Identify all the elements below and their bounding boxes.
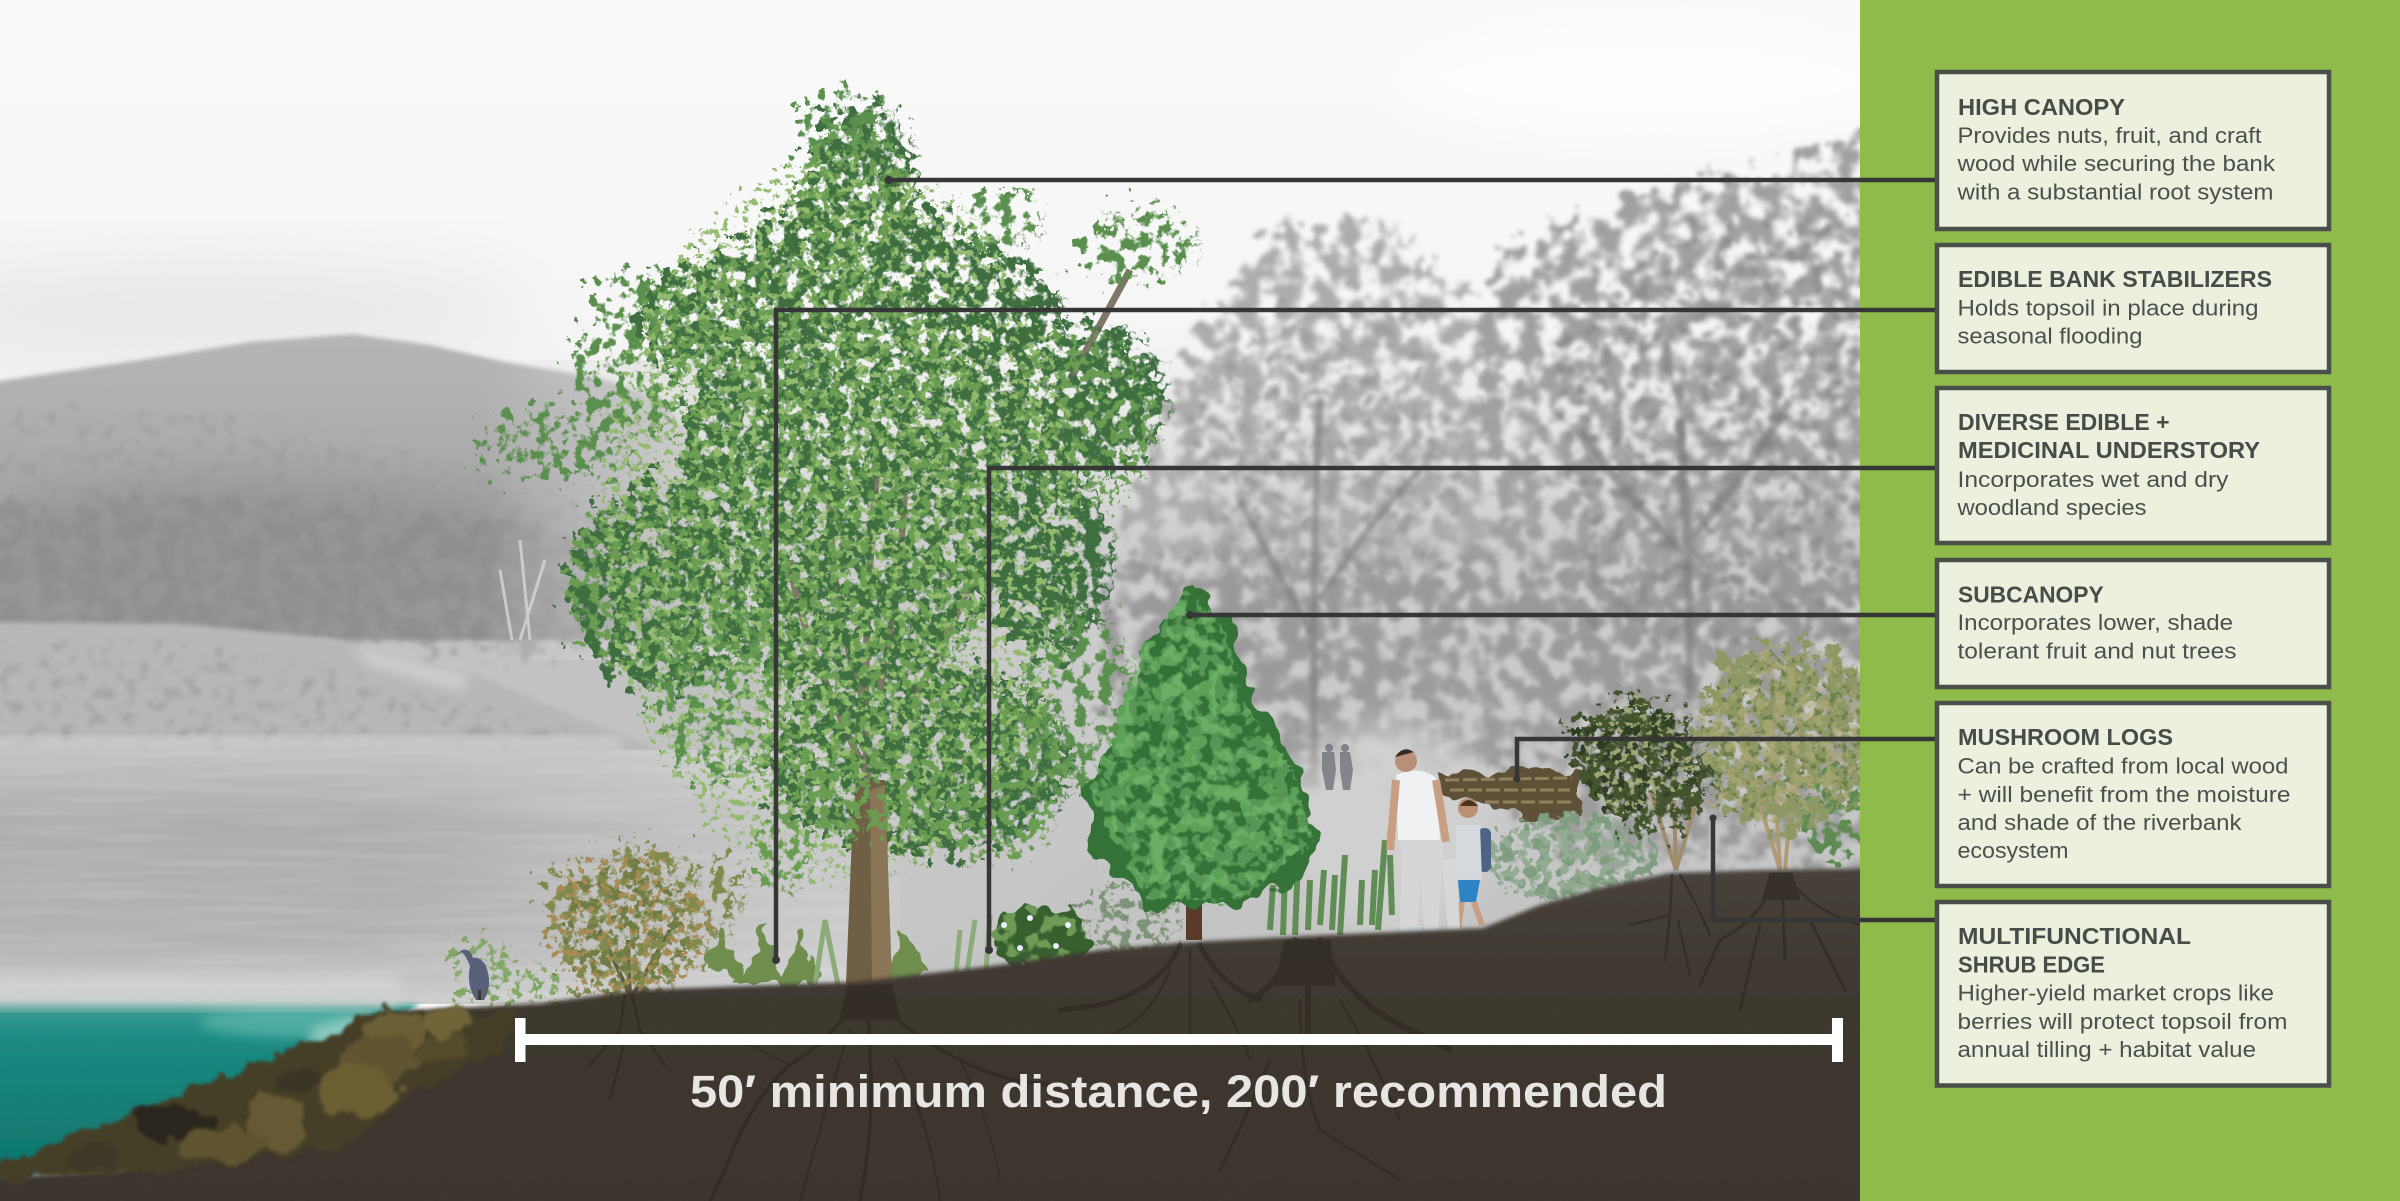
shrub: green reeds beside heron [455,935,580,1005]
lower hanging foliage [760,760,1060,895]
pale iris reeds [1270,840,1392,935]
callout: edible bank stabilizers [1937,245,2329,372]
leader: high canopy [885,176,1937,184]
leader: multifunctional shrub edge [1710,814,1937,920]
green side panel [1860,0,2400,1201]
roots of main tree [710,985,1060,1201]
distant mountain [0,334,760,760]
ferns [705,915,990,985]
blue-green shrub mass by path [1490,765,1865,903]
callout: multifunctional shrub edge: Higher-yield market crops like [1958,981,2274,1006]
callout: diverse edible + medicinal understory: Incorporates wet and dry [1958,467,2229,492]
callout: diverse edible + medicinal understory: MEDICINAL UNDERSTORY [1958,437,2260,463]
callout: mushroom logs [1937,703,2329,886]
callout: mushroom logs: Can be crafted from local wood [1958,754,2288,778]
shrub: olive flowering shrub, left [550,840,760,1000]
canopy foliage dark [570,105,1170,855]
flowering understory plant [992,902,1088,968]
distance bar [515,1018,1843,1062]
sky [0,0,1910,520]
callout: high canopy [1937,72,2329,229]
callout: mushroom logs: and shade of the riverbank [1958,810,2242,835]
soil cross-section [0,868,1880,1201]
trunk [846,780,892,984]
callout: high canopy: wood while securing the bank [1956,151,2276,176]
callout: mushroom logs: ecosystem [1958,838,2068,863]
mossy river rocks [0,1004,515,1182]
grey-green low shrub [1085,880,1189,960]
callout: subcanopy: Incorporates lower, shade [1958,610,2233,635]
canopy foliage outer sprays [480,90,1205,790]
callout: edible bank stabilizers: Holds topsoil in place during [1958,296,2258,320]
callout: mushroom logs: + will benefit from the moisture [1958,782,2290,807]
subcanopy tree [1085,585,1320,940]
underwater river section [0,992,420,1190]
canopy foliage highlights [610,160,1090,880]
leader: edible bank stabilizers [772,310,1937,964]
heron [454,950,489,1000]
callout: diverse edible + medicinal understory: DIVERSE EDIBLE + [1958,409,2170,435]
leader: mushroom logs [1514,739,1937,782]
callout: high canopy: HIGH CANOPY [1958,94,2125,120]
callout: multifunctional shrub edge [1937,902,2329,1086]
shrub: tall olive shrub, right [1700,640,1870,870]
callout: subcanopy: tolerant fruit and nut trees [1958,638,2236,664]
roots of iris clump [1220,940,1450,1180]
roots of subcanopy tree [1060,945,1260,1060]
canopy foliage mid green [570,130,1165,850]
callout: diverse edible + medicinal understory: woodland species [1956,495,2146,520]
callout: subcanopy [1937,560,2329,687]
leader: understory [985,468,1937,954]
shrub: dark olive shrub, right [1570,695,1720,870]
child [1442,798,1491,930]
callout: subcanopy: SUBCANOPY [1958,582,2104,608]
far river bank [0,622,660,754]
callout: multifunctional shrub edge: MULTIFUNCTIONAL [1958,923,2191,949]
root systems [590,873,1860,1201]
roots of olive shrub right [1700,873,1860,1010]
callout: multifunctional shrub edge: SHRUB EDGE [1958,952,2105,978]
callout: diverse edible + medicinal understory [1937,388,2329,543]
distance label: 50′ minimum distance, 200′ recommended [690,1066,1667,1117]
callout: multifunctional shrub edge: berries will protect topsoil from [1958,1009,2288,1034]
background trees in grey [830,120,1880,970]
callout: high canopy: with a substantial root system [1956,180,2274,204]
roots of dark shrub [1630,875,1710,975]
leader lines [772,176,1937,964]
callout: multifunctional shrub edge: annual tilling + habitat value [1958,1037,2256,1062]
river surface [0,750,900,1007]
callout: edible bank stabilizers: seasonal flooding [1958,324,2142,349]
callout: high canopy: Provides nuts, fruit, and craft [1958,123,2262,148]
roots of olive shrub [590,995,665,1100]
leader: subcanopy [1186,611,1937,619]
people: adult and child walking [1390,749,1491,934]
callout: edible bank stabilizers: EDIBLE BANK STABILIZERS [1958,266,2272,292]
distant walkers [1322,744,1353,790]
main high canopy tree [480,90,1205,984]
panel: riverbank scene illustration [0,0,1910,1201]
stacked mushroom logs [1438,770,1580,820]
adult [1390,749,1446,934]
background fog layer [620,330,1860,1000]
tree limbs [790,270,1130,800]
callout: mushroom logs: MUSHROOM LOGS [1958,724,2173,750]
